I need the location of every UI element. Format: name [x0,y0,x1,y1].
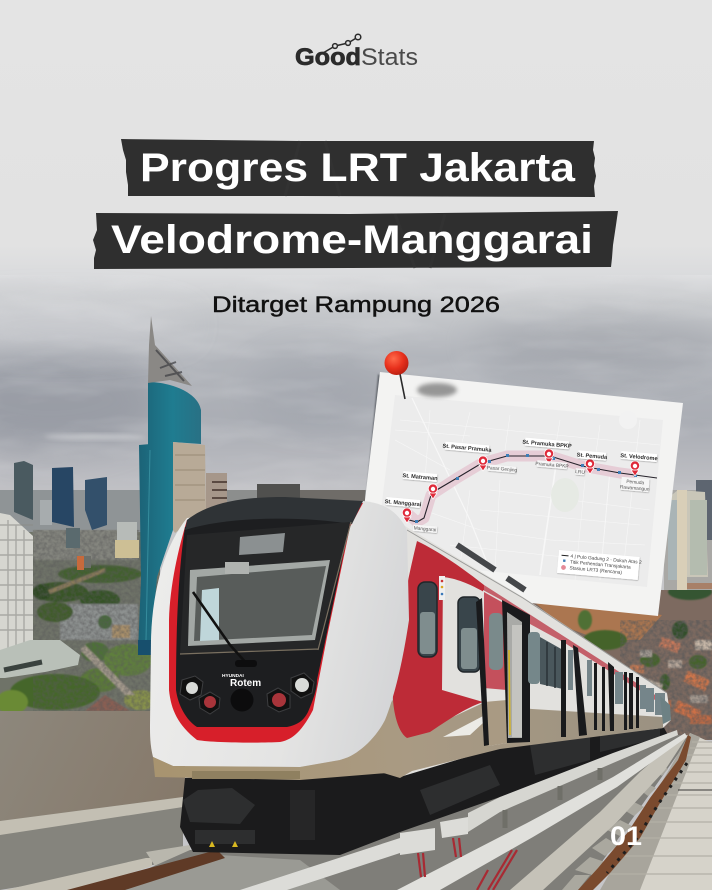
station labels: St. Velodrome [620,453,658,462]
side body white base [400,523,671,777]
roof cap [185,497,363,530]
concrete beam [510,735,688,890]
station labels: St. Matraman [402,473,438,482]
map legend: Titik Perhentian Transjakarta [570,559,631,571]
front white shell [150,501,409,767]
hillside housing on the right [530,584,712,745]
logo: GoodStats: Stats [361,44,418,71]
station labels: St. Pasar Pramuka [442,444,493,454]
transit stop dots [415,454,637,523]
roof edge shadow [407,530,667,693]
maker logo: HYUNDAI [222,673,245,679]
route corridor [407,456,635,522]
track bed [67,733,712,890]
upper beam [240,838,400,890]
warning labels [209,841,215,847]
signal lights [439,576,445,600]
side red livery [393,541,484,738]
map legend: 4 | Pulo Gadung 2 - Dukuh Atas 2 [570,554,642,566]
map card [355,372,683,616]
push pin [384,351,457,399]
title strip 2 [93,211,618,269]
high-rise towers on the right [664,480,712,595]
first door [483,590,507,746]
distant towers [14,461,33,520]
title strip 1 [121,139,596,197]
side windows [418,582,480,672]
podium [0,640,80,678]
transit stop labels: Pasar Genjing [487,465,518,474]
right running rail [578,735,691,890]
white guide beams [240,730,687,890]
headlights [180,673,314,714]
station labels: St. Pramuka BPKP [522,440,572,450]
transit stop labels: Pemuda [626,479,645,486]
transit stop labels: LRU [575,469,586,476]
transit stop labels: Manggarai [413,525,437,533]
second window group [528,632,540,684]
route line [409,456,657,522]
station labels: St. Manggarai [384,499,422,508]
red face outline [169,502,363,743]
rail sleepers [562,765,668,890]
hotel tower [0,513,33,652]
roof ventilation [457,545,525,590]
far windows [568,650,665,715]
maker logo: Rotem [230,678,261,689]
concrete wall, ledge and left track [0,711,190,890]
station labels [384,437,658,508]
black face mask [176,517,350,727]
Wisma 46 tower [138,316,227,655]
distant city between tower and map [227,484,372,512]
side pink stripe [484,585,663,705]
station labels: St. Pemuda [577,452,608,461]
front lower beige skirt [153,740,412,780]
transit stop labels: Pramuka BPKP [535,461,569,470]
train [150,497,671,855]
windscreen [180,522,350,654]
logo icon: rising line chart [323,34,361,53]
logo: GoodStats [295,34,418,71]
station pins [402,449,640,523]
white decorative swoosh [443,712,505,737]
transit stop labels: Rawamangun [620,484,650,493]
ground greenery and blocks [0,530,156,714]
map base with streets [551,478,579,512]
logo wordmark: Good [295,44,361,71]
lower beam [397,733,687,890]
title line 1: Progres LRT Jakarta [140,146,576,190]
right platform with sleepers [617,733,712,890]
transit stop labels [413,460,651,533]
destination sign [239,533,285,555]
trim line and wiper [180,522,351,654]
map legend: Stasiun LRT3 (Rencana) [569,565,623,576]
map legend [557,550,642,580]
open door [502,600,530,743]
doors toward the far end [561,640,639,737]
undercarriage [180,726,668,855]
side lower beige [340,700,663,778]
page number: 01 [610,821,642,851]
left running rail [67,850,225,890]
subtitle: Ditarget Rampung 2026 [212,292,500,317]
power cables [418,838,517,890]
title line 2: Velodrome-Manggarai [111,218,593,262]
city skyline on the left [0,461,160,714]
maker logo [222,673,261,689]
